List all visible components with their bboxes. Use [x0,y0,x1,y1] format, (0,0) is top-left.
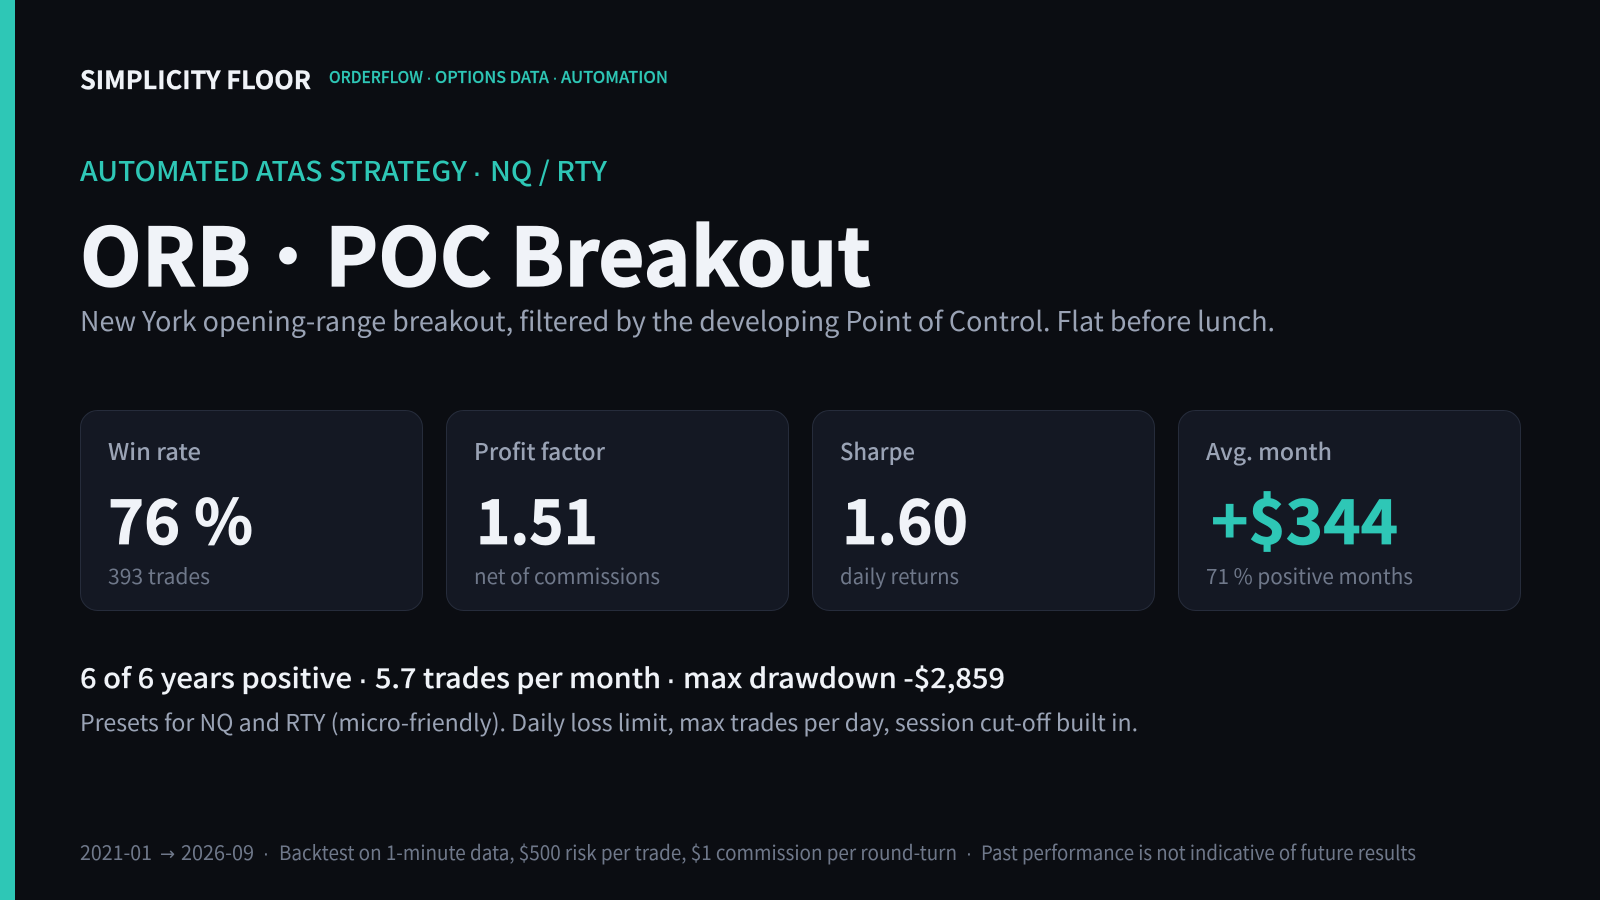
key stats line: · [666,661,676,697]
title: · [256,207,320,299]
key stats line: · [358,661,368,697]
win rate label: Win rate [108,433,201,467]
footer disclaimer: 2026-09 [181,837,254,866]
brand tagline: · [426,70,432,87]
footer disclaimer: Backtest on 1-minute data, $500 risk per trade, $1 commission per round-turn [279,837,957,866]
kicker [80,150,607,190]
brand tagline: OPTIONS DATA [435,64,549,88]
avg month value: +$344 [1211,472,1398,562]
panel: profit factor [446,410,788,610]
avg month label: Avg. month [1206,433,1332,467]
key stats line [80,657,1005,697]
subtitle: New York opening-range breakout, filtered by the developing Point of Control. Flat before lunch. [80,300,1275,339]
description: Presets for NQ and RTY (micro-friendly). Daily loss limit, max trades per day, session cut-off built in. [80,704,1138,738]
brand tagline: AUTOMATION [561,64,668,88]
footer disclaimer: 2021-01 [80,837,152,866]
title [80,194,871,310]
panel: sharpe [812,410,1154,610]
footer disclaimer: · [263,843,269,865]
footer disclaimer: → [160,844,175,865]
panel: avg month [1178,410,1520,610]
brand name: SIMPLICITY FLOOR [80,61,311,97]
sharpe note: daily returns [840,561,959,591]
title: POC Breakout [325,194,871,310]
brand header [80,61,668,97]
key stats line: 5.7 trades per month [375,657,661,696]
sharpe value: 1.60 [842,472,968,562]
profit factor label: Profit factor [474,433,606,467]
panel: win rate [80,410,422,610]
brand tagline: ORDERFLOW [329,64,423,88]
key stats line: 6 of 6 years positive [80,657,352,696]
brand tagline: · [552,70,558,87]
kicker: AUTOMATED ATAS STRATEGY [80,150,467,189]
win rate value: 76 % [108,472,253,562]
avg month note: 71 % positive months [1206,561,1413,591]
sharpe label: Sharpe [840,433,915,467]
title: ORB [80,194,251,310]
kicker: · [472,154,482,190]
brand tagline [329,64,668,88]
accent bar [0,0,15,900]
win rate note: 393 trades [108,561,210,591]
footer disclaimer [80,837,1416,866]
footer disclaimer: · [966,843,972,865]
profit factor note: net of commissions [474,561,660,591]
kicker: NQ / RTY [490,150,607,189]
key stats line: max drawdown -$2,859 [683,657,1005,696]
footer disclaimer: Past performance is not indicative of future results [981,837,1416,866]
profit factor value: 1.51 [476,472,598,562]
